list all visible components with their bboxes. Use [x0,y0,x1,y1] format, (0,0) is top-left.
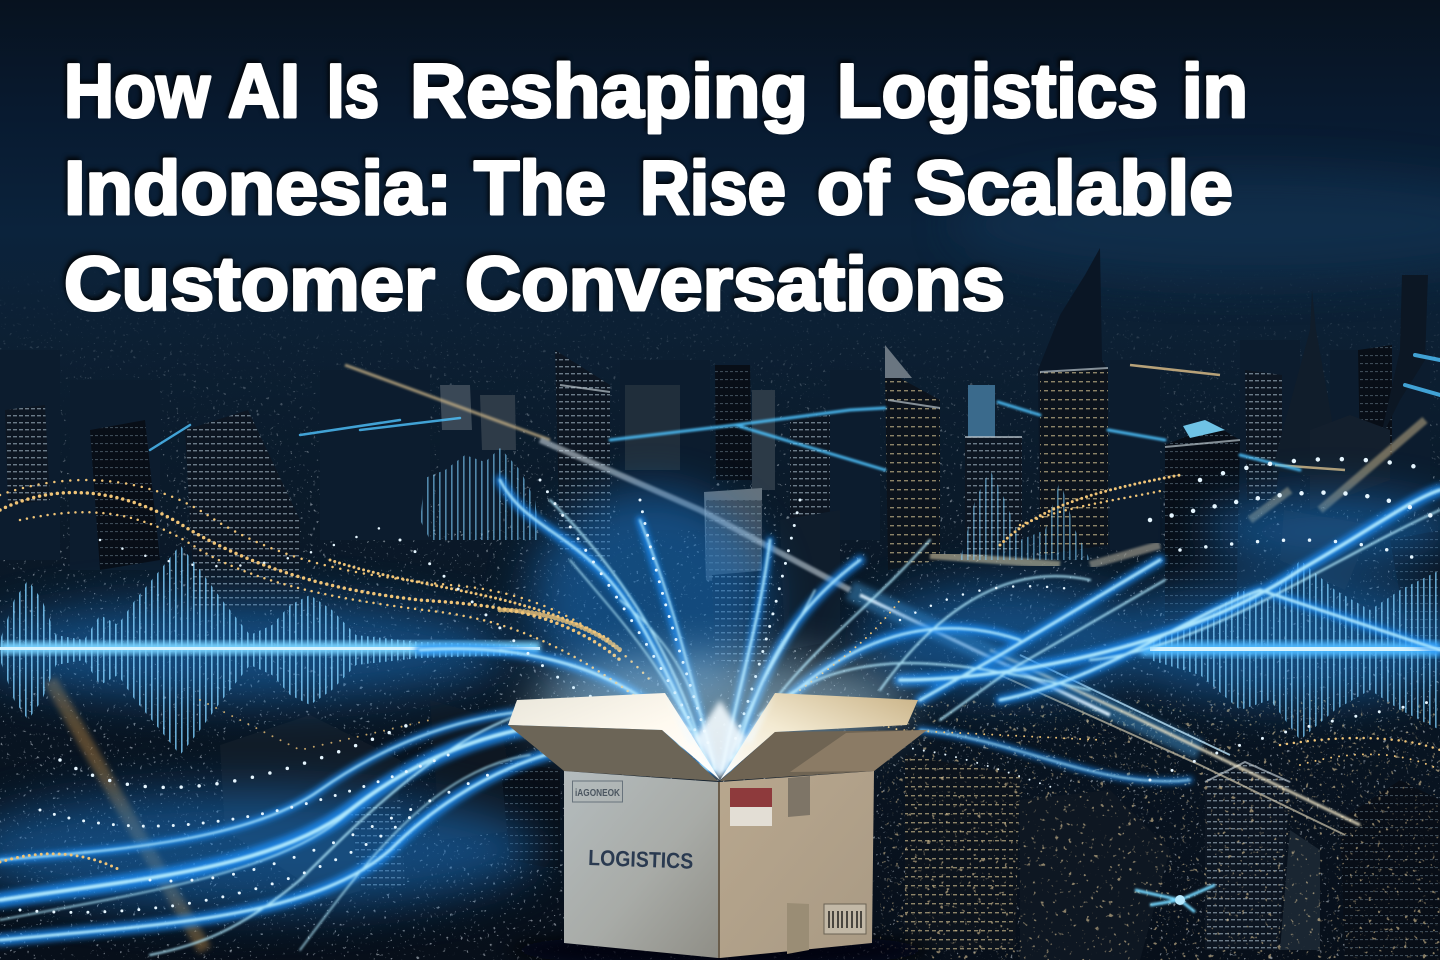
title line 3 [64,242,1005,327]
title line 1: AI [228,49,300,134]
upper tape [788,776,810,817]
distant city lights [0,270,1440,960]
Indonesian flag [730,788,772,826]
title line 1: in [1182,49,1248,134]
brand label [572,781,622,802]
tower roof highlights [560,368,1290,782]
title line 1 [64,49,1248,134]
city skyline buildings [0,248,1440,960]
title line 1: Is [327,49,379,134]
bottom right towers [905,755,1020,950]
far skyline blocks [0,340,1430,570]
title [64,49,1248,327]
waveform bars upper center [421,448,537,540]
title line 2 [64,146,1233,231]
glowing cyan data links [150,355,1440,470]
right face [720,771,874,958]
left outer flap [508,725,718,781]
waveform bars near towers [961,472,1089,560]
illuminated roads [50,365,1425,950]
title line 2: Rise [640,146,786,231]
white light particles [20,459,1440,912]
audio waveform right [1140,555,1440,745]
title line 3: Customer [64,242,435,327]
center edge [718,782,720,958]
title line 2: The [474,146,606,231]
lower left road [50,680,205,950]
barcode [824,904,866,934]
title line 1: How [64,49,211,134]
cardboard box [508,655,930,960]
gold particle trails [0,475,1440,870]
title line 1: Logistics [837,49,1158,134]
energy streams from the box [0,480,1440,955]
horizon haze [950,170,1440,280]
main highway [850,590,1200,750]
left flap inner glow [508,693,720,780]
title line 3: Conversations [465,242,1005,327]
bright strands [0,480,1440,955]
box shadow [510,934,930,960]
logistics label: LOGISTICS [588,845,694,874]
title line 2: Scalable [914,146,1233,231]
center towers [555,350,610,560]
lit roads at right [1250,420,1425,520]
lower tape [787,903,809,954]
bottom left towers [220,715,400,900]
gold speckle layer [880,700,1440,960]
title line 1: Reshaping [410,49,808,134]
left towers [5,405,50,505]
right outer flap [720,730,927,781]
left face [564,771,718,958]
wide glow strands [0,480,1440,940]
title line 2: of [817,146,890,231]
right flap inner glow [720,693,918,780]
box center glow [665,693,775,780]
upper road [345,365,550,440]
audio waveform left [0,540,540,760]
right cluster towers [885,370,940,570]
burst glow [528,655,908,755]
drone [1135,885,1215,912]
title line 2: Indonesia: [64,146,452,231]
blue haze behind waveforms [0,490,1440,910]
brand label: iAGONEOK [575,788,621,799]
